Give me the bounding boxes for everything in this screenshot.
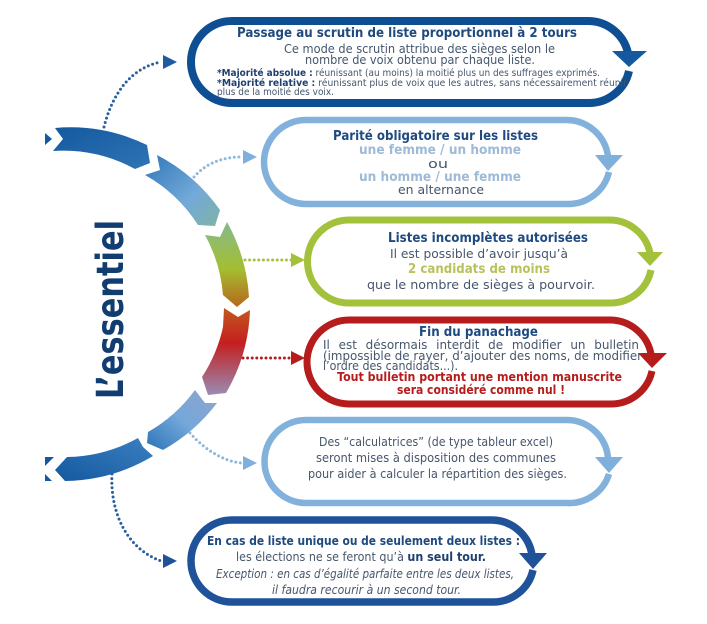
curved arrow ring [45, 127, 250, 481]
text: interdiction line 3: l’ordre des candidats...). [323, 359, 458, 373]
connector: to panel 6 [112, 474, 177, 568]
outline: panel 6 [191, 520, 533, 602]
arrowhead: panel 6 [519, 553, 547, 569]
text: interdiction line 2: (impossible de rayer, d’ajouter des noms, de modifier [323, 349, 642, 363]
panel: scrutin de liste [191, 21, 647, 103]
connector: to panel 2 [194, 150, 257, 177]
connector: to panel 3 [245, 253, 305, 267]
text: il est possible: Il est possible d’avoir jusqu’à [390, 247, 568, 261]
panel: fin du panachage [307, 320, 667, 404]
text: répartition: pour aider à calculer la répartition des sièges. [308, 467, 567, 481]
heading: panel 3: Listes incomplètes autorisées [388, 231, 588, 246]
outline: panel 1 [191, 21, 629, 103]
connector: to panel 4 [243, 351, 305, 365]
text: que le nombre: que le nombre de sièges à pourvoir. [367, 278, 595, 292]
outline: panel 5 [264, 420, 609, 503]
text: un homme: un homme / une femme [359, 170, 521, 185]
outline: panel 2 [264, 120, 609, 204]
connector: to panel 5 [190, 433, 257, 470]
text: mises à disposition: seront mises à disposition des communes [316, 451, 556, 465]
text: calculatrices: Des “calculatrices” (de type tableur excel) [319, 435, 553, 449]
connector: to panel 1 [104, 55, 177, 127]
arrowhead: panel 5 [595, 457, 623, 473]
heading: panel 2: Parité obligatoire sur les listes [333, 129, 538, 144]
text: majorité relative suite: plus de la moitié des voix. [217, 87, 334, 98]
text: majorité relative: *Majorité relative : réunissant plus de voix que les autres, sans nécessairement réunir [217, 78, 627, 89]
text: un seul tour: les élections ne se feront qu’à un seul tour. [236, 550, 486, 564]
arrowhead: panel 1 [612, 51, 647, 67]
outline: panel 3 [308, 220, 651, 303]
text: 2 candidats: 2 candidats de moins [408, 262, 550, 277]
heading: panel 6: En cas de liste unique ou de seulement deux listes : [207, 534, 520, 548]
text: second tour: il faudra recourir à un second tour. [272, 583, 461, 597]
text: exception: Exception : en cas d’égalité parfaite entre les deux listes, [216, 567, 514, 581]
text: en alternance: en alternance [398, 183, 484, 197]
panel: liste unique [191, 520, 547, 602]
heading: panel 1: Passage au scrutin de liste proportionnel à 2 tours [237, 26, 577, 41]
text: une femme: une femme / un homme [359, 143, 521, 158]
arrowhead: panel 3 [637, 252, 663, 266]
panel: listes incomplètes [308, 220, 663, 303]
text: majorité absolue: *Majorité absolue : réunissant (au moins) la moitié plus un des suffrages exprimés. [217, 68, 600, 79]
arrowhead: panel 2 [595, 155, 623, 171]
title: L'essentiel: L’essentiel [89, 220, 132, 399]
text: considéré nul: sera considéré comme nul ! [397, 383, 565, 397]
text: ou: ou [428, 157, 448, 171]
arrowhead: panel 4 [638, 353, 667, 368]
text: bulletin mention: Tout bulletin portant une mention manuscrite [337, 370, 622, 384]
text: nombre de voix: nombre de voix obtenu par chaque liste. [305, 53, 535, 67]
text: interdiction line 1: Il est désormais interdit de modifier un bulletin [323, 338, 639, 352]
panel: calculatrices [264, 420, 623, 503]
outline: panel 4 [307, 320, 652, 404]
text: mode de scrutin: Ce mode de scrutin attribue des sièges selon le [284, 42, 555, 56]
panel: parité [264, 120, 623, 204]
heading: panel 4: Fin du panachage [419, 325, 538, 340]
